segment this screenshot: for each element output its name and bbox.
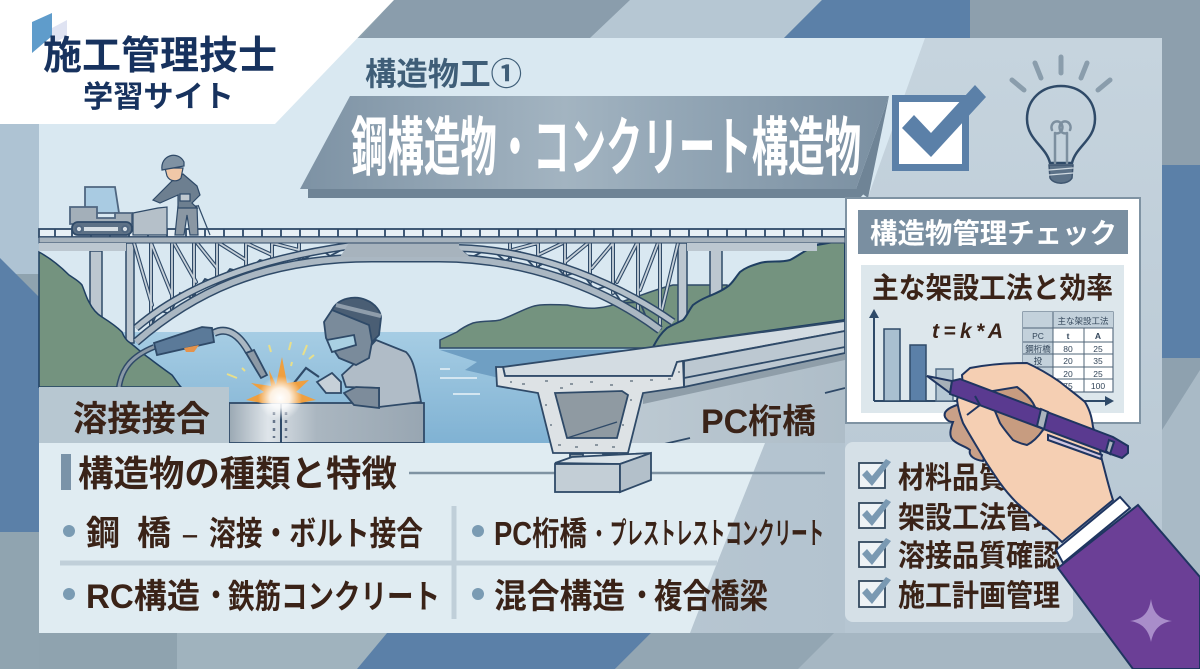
check item 4 [859,577,1060,613]
icon: light bulb [1012,57,1110,183]
item: composite structure: ・ [629,580,655,613]
item: PC girder bridge [472,515,824,552]
card header [858,210,1128,254]
icon: worker on bridge [133,155,210,235]
check item 2 [859,499,1060,535]
check item 4: 施工計画管理 [898,580,1060,613]
pen [927,376,1128,459]
item: composite structure: 混合構造 [494,578,625,616]
check item 1: 材料品質管理 [898,462,1060,495]
label: welded joint: 溶接接合 [73,400,210,439]
card header text: 構造物管理チェック [870,218,1117,249]
illustration: hand with pen [927,363,1200,669]
water [39,332,845,443]
truss members [134,243,678,328]
item: steel bridge: – [182,522,198,549]
cuff [1056,497,1130,563]
illustration: welder [119,298,424,443]
left hill [39,252,181,387]
data table: 80 [1063,344,1073,354]
logo subtitle: 学習サイト [83,81,234,114]
title banner [300,96,889,198]
item: steel bridge: 鋼橋 [86,515,171,553]
item: PC girder bridge: プレストレストコンクリート [610,518,824,551]
bar chart [869,309,1114,406]
chart title: 主な架設工法と効率 [872,272,1113,305]
data table: 主な架設工法 [1057,316,1109,326]
item: RC structure: RC構造 [86,578,200,616]
item: PC girder bridge: ・ [590,519,608,549]
spark [227,342,316,420]
check item 1 [859,459,1060,495]
data table: 鋼桁橋 [1025,344,1051,354]
item: RC structure: 鉄筋コンクリート [228,578,440,615]
data table: 100 [1091,381,1105,391]
welding torch [119,327,267,387]
label: welded joint [39,387,229,443]
icon: checkbox [896,85,986,168]
steel arch [136,243,673,342]
item: composite structure [472,578,768,616]
data table: 20 [1063,356,1073,366]
bridge piers [90,243,722,343]
data table: t [1067,331,1070,341]
data table: A [1095,331,1101,341]
palm shadow [987,387,1043,445]
water ripples [440,369,480,394]
icon: sparkle [1130,599,1172,642]
back fingers [945,405,990,461]
icon: logo mark [32,13,67,53]
pier [555,453,651,492]
welder helmet [324,298,381,365]
data table: PC [1032,331,1044,341]
far hill [440,285,727,348]
subtitle: 構造物工① [365,56,522,92]
label: PC girder bridge: PC桁橋 [701,403,816,441]
logo area [0,0,394,124]
PC girder span [503,321,845,452]
lower panel: structure types [39,443,845,633]
item: PC girder bridge: PC桁橋 [494,515,587,552]
logo title: 施工管理技士 [43,35,277,78]
welder body [342,340,421,407]
item: steel bridge [63,515,423,553]
data table: 25 [1093,369,1103,379]
checklist panel [845,442,1073,622]
bridge deck [39,229,845,251]
data table: 75 [1063,381,1073,391]
thumb nail line [967,396,980,415]
data table: 投 [1034,356,1043,366]
formula: t = k * A [932,320,1003,343]
heading marker [61,454,71,490]
data table [1023,312,1113,392]
steel block [229,403,424,443]
section heading: 構造物の種類と特徴 [78,453,397,494]
rear glove [344,387,379,408]
data table: 20 [1063,369,1073,379]
sleeve [1058,505,1200,669]
darker water [440,350,640,400]
data table: 35 [1093,356,1103,366]
icon: machine on bridge [70,187,132,235]
check item 3: 溶接品質確認 [898,540,1060,573]
bridge scene [39,229,845,443]
inner chart panel [861,265,1124,413]
data table: 25 [1093,344,1103,354]
card: management check [846,198,1140,423]
front glove [294,368,341,393]
check item 2: 架設工法管理 [898,502,1060,535]
hand [957,363,1113,542]
right hill [653,240,845,347]
item: RC structure [63,578,440,616]
item: composite structure: 複合橋梁 [654,578,768,616]
item: RC structure: ・ [203,580,229,613]
illustration: PC girder section and pier [496,361,684,492]
item: steel bridge: 溶接・ボルト接合 [209,515,423,552]
